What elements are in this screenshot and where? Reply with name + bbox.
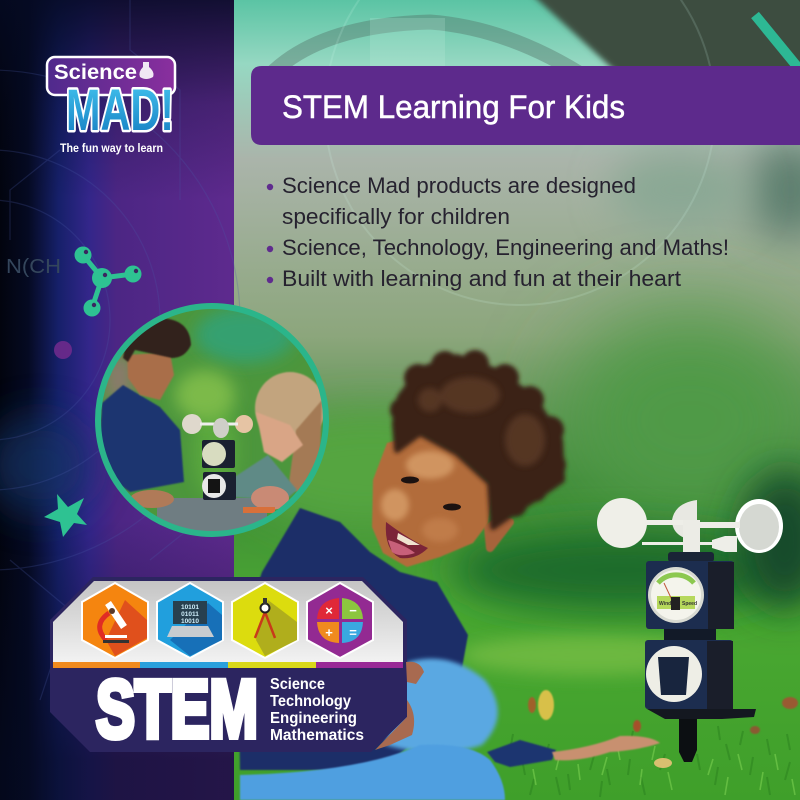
centre dome xyxy=(672,500,697,541)
grass leaves xyxy=(528,690,798,734)
table xyxy=(157,498,267,531)
STEM words: Mathematics xyxy=(270,727,364,744)
boy mouth xyxy=(386,522,428,558)
icon: science microscope xyxy=(82,583,148,658)
boy knee xyxy=(385,659,498,752)
STEM words: Engineering xyxy=(270,710,357,727)
right girl hand xyxy=(251,486,289,510)
right girl face xyxy=(256,412,303,462)
STEM words: Technology xyxy=(270,693,351,710)
lower side xyxy=(707,641,733,709)
orange pad xyxy=(243,507,275,513)
badge grey top xyxy=(53,581,403,662)
dial: Speed xyxy=(682,601,697,607)
bullet list xyxy=(267,173,729,291)
fallen leaf xyxy=(654,758,672,768)
connector xyxy=(664,629,716,641)
STEM words xyxy=(270,676,364,744)
teal ring xyxy=(98,306,326,534)
circular photo: children with wind meter xyxy=(90,300,340,540)
upper box xyxy=(646,561,734,629)
collar xyxy=(668,552,714,562)
icon: mathematics symbols: + xyxy=(325,625,333,640)
right girl hair xyxy=(254,371,323,435)
boy lower jeans xyxy=(240,745,505,800)
boy face xyxy=(372,433,493,567)
boy eyes xyxy=(401,476,461,510)
small wind meter xyxy=(182,414,253,500)
right cup xyxy=(735,499,783,553)
boy hair xyxy=(390,350,566,527)
solar panel xyxy=(658,657,689,695)
background chemistry label: N(CH xyxy=(6,256,61,278)
boy hand over badge xyxy=(375,662,424,750)
STEM words: Science xyxy=(270,676,325,693)
logo science word: Science xyxy=(54,61,137,84)
photo: smiling boy xyxy=(238,350,660,800)
icon: technology laptop: 10101 xyxy=(181,604,199,611)
logo flask xyxy=(139,62,154,79)
colour stripes xyxy=(53,662,403,668)
icon: mathematics symbols: − xyxy=(349,603,357,618)
bullet list: Science Mad products are designed xyxy=(282,173,636,198)
spindle xyxy=(683,520,700,554)
base plate xyxy=(647,709,756,719)
icon: mathematics symbols xyxy=(307,583,373,658)
face highlight xyxy=(381,451,458,542)
left boy sweater xyxy=(100,385,184,492)
heading banner: STEM Learning For Kids xyxy=(282,89,625,125)
boy sweater xyxy=(238,508,468,770)
left panel: purple gradient xyxy=(0,0,240,800)
left boy hand xyxy=(130,490,174,508)
icon: technology laptop: 10010 xyxy=(181,618,199,625)
left boy face xyxy=(127,352,174,400)
upper side xyxy=(708,562,734,629)
dial xyxy=(648,567,704,623)
logo plate xyxy=(47,57,175,95)
boy tongue xyxy=(388,540,415,555)
boy hand on grass xyxy=(552,736,660,760)
heading banner xyxy=(251,66,800,145)
bullet list: Built with learning and fun at their heart xyxy=(282,266,681,291)
icon: star xyxy=(44,494,87,537)
right girl hair long xyxy=(288,400,322,492)
boy ear xyxy=(488,520,510,548)
STEM badge xyxy=(50,577,407,755)
right girl top xyxy=(236,454,298,498)
background: photo garden xyxy=(234,0,800,800)
dial: Wind xyxy=(659,601,671,607)
icon: technology laptop: 01011 xyxy=(181,611,199,618)
boy sleeve xyxy=(487,740,556,767)
badge navy shape xyxy=(50,577,407,752)
boy teeth xyxy=(397,533,420,545)
stake xyxy=(679,719,697,762)
photo: wind meter xyxy=(597,498,783,768)
logo tagline: The fun way to learn xyxy=(60,141,163,155)
STEM wordmark: STEM xyxy=(96,664,258,755)
logo MAD word: MAD! xyxy=(66,78,174,143)
bullet list: Science, Technology, Engineering and Maths! xyxy=(282,235,729,260)
solar ring xyxy=(646,646,702,702)
arms xyxy=(642,520,740,552)
left boy hair xyxy=(123,318,191,362)
icon: mathematics symbols: = xyxy=(349,625,357,640)
icon: mathematics symbols: × xyxy=(325,603,333,618)
lower box xyxy=(645,640,733,709)
icon: technology laptop xyxy=(157,583,223,658)
icon: molecule xyxy=(74,246,142,316)
bullet list: specifically for children xyxy=(282,204,510,229)
logo: Science Mad xyxy=(47,57,175,155)
icon: engineering compass xyxy=(232,583,298,658)
left cup xyxy=(597,498,647,548)
